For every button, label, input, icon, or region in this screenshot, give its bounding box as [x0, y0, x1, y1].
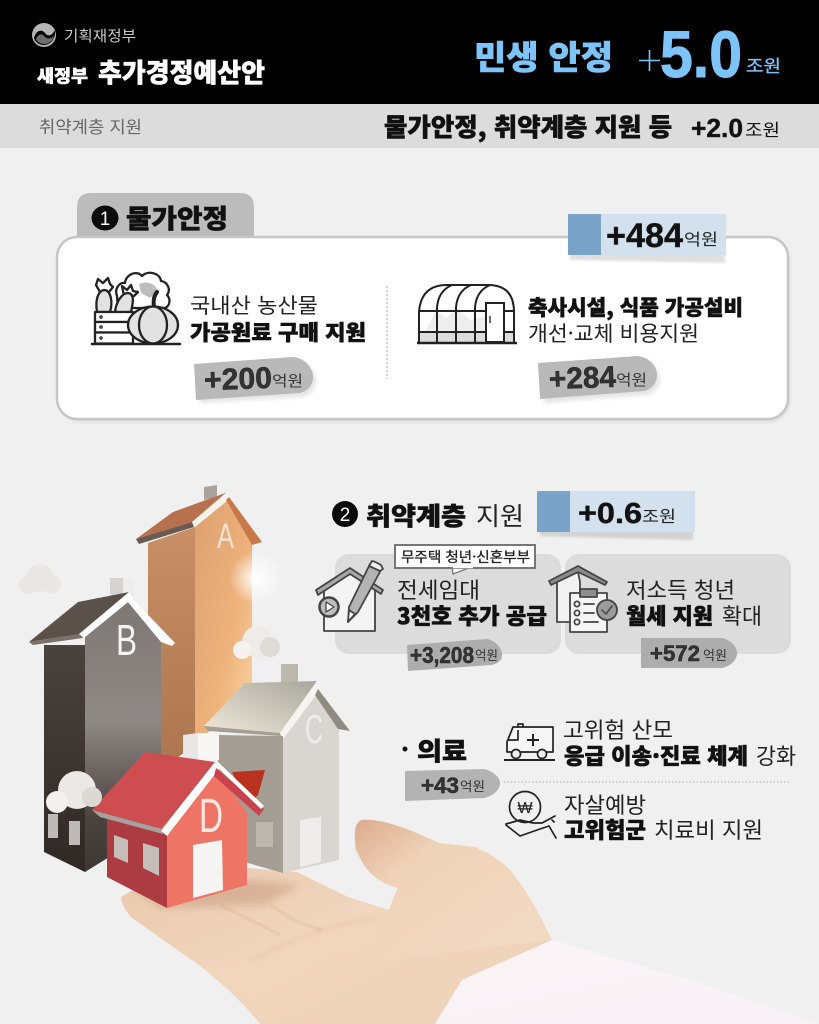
clouds — [19, 564, 280, 813]
text: rent: 확대 — [722, 599, 762, 631]
sleeve — [435, 940, 819, 1024]
pill: 284 — [538, 356, 660, 403]
house D: D — [199, 790, 223, 843]
text: facility improvement: 개선·교체 비용지원 — [528, 318, 699, 348]
sub header amount — [691, 113, 780, 143]
icon: ambulance — [504, 724, 555, 760]
text: lease: 3천호 추가 공급 — [397, 599, 547, 631]
section tab: 물가안정 — [126, 199, 228, 236]
amount tag: 0.6: 조원 — [642, 503, 676, 527]
text: suicide prevention: 치료비 지원 — [654, 813, 763, 845]
icon: greenhouse — [417, 285, 517, 343]
icon: hand with won coin: ₩ — [517, 800, 533, 817]
panel: medical support — [402, 713, 796, 845]
pill: 572: +572 — [650, 641, 700, 666]
text: domestic produce — [190, 290, 366, 347]
text: high-risk maternity: 응급 이송·진료 체계 — [564, 739, 748, 771]
pill: 3208: 억원 — [475, 645, 498, 664]
title: small: 새정부 — [37, 62, 88, 87]
text: domestic produce: 가공원료 구매 지원 — [190, 317, 366, 347]
ministry logo — [32, 23, 56, 47]
pill: 572 — [641, 638, 737, 668]
text: facility improvement — [528, 292, 743, 348]
house C: C — [305, 706, 323, 752]
amount tag: 0.6 — [537, 491, 695, 540]
pill: 572: 억원 — [703, 645, 727, 664]
pill: 284: +284 — [548, 361, 617, 396]
house C — [204, 664, 350, 873]
text: suicide prevention — [564, 788, 763, 845]
callout — [395, 545, 535, 574]
divider — [504, 781, 789, 783]
ministry name: 기획재정부 — [64, 25, 136, 46]
sub header band — [0, 104, 819, 148]
icon: house and checklist — [549, 566, 617, 632]
amount tag: 484: +484 — [606, 217, 683, 255]
text: high-risk maternity: 고위험 산모 — [563, 713, 673, 745]
text: suicide prevention: 고위험군 — [564, 813, 646, 845]
pill: 200: +200 — [203, 362, 273, 397]
house B — [29, 578, 175, 872]
text: high-risk maternity: 강화 — [756, 739, 796, 771]
callout: 무주택 청년·신혼부부 — [401, 547, 530, 567]
sub header left label: 취약계층 지원 — [39, 113, 142, 138]
text: rent: 저소득 청년 — [626, 573, 735, 605]
title: main: 추가경정예산안 — [98, 53, 265, 90]
pill: 3208: +3,208 — [410, 642, 474, 668]
text: facility improvement: 축사시설, 식품 가공설비 — [528, 292, 743, 322]
section heading: 취약계층 — [366, 497, 466, 533]
icon: vegetables — [92, 273, 180, 344]
headline amount: 5.0 — [660, 17, 742, 91]
pill: 200 — [194, 357, 316, 403]
headline: livelihood stabilization: 민생 안정 — [474, 31, 613, 79]
icon: house and pencil — [316, 561, 383, 631]
text: lease — [397, 573, 547, 631]
house B: B — [116, 616, 137, 665]
icon: hand with won coin — [506, 792, 556, 838]
section heading: 지원 — [476, 497, 524, 533]
pill: 3208 — [407, 639, 502, 671]
pill: 43 — [405, 769, 500, 801]
section heading: 2 — [340, 505, 350, 526]
text: rent: 월세 지원 — [626, 599, 713, 631]
sub header right label: 물가안정, 취약계층 지원 등 — [384, 108, 672, 144]
house D — [92, 733, 264, 908]
section tab: 1 — [100, 209, 110, 230]
sub header amount: 조원 — [745, 116, 780, 141]
text: rent — [626, 573, 762, 631]
text: domestic produce: 국내산 농산물 — [190, 290, 318, 320]
text: suicide prevention: 자살예방 — [564, 788, 646, 820]
divider — [386, 286, 388, 379]
amount tag: 484 — [568, 214, 726, 263]
pill: 200: 억원 — [272, 370, 303, 391]
panel: price stabilization — [57, 193, 789, 421]
sub header amount: +2.0 — [691, 113, 743, 143]
header band — [0, 0, 819, 104]
pill: 43: 억원 — [460, 776, 485, 795]
card: rent support — [549, 554, 791, 668]
illustration: hand — [121, 820, 819, 1024]
text: high-risk maternity — [563, 713, 796, 771]
house A: A — [217, 517, 234, 556]
headline amount — [639, 17, 781, 91]
amount tag: 0.6: +0.6 — [578, 498, 642, 530]
card — [57, 237, 789, 421]
section tab — [77, 193, 254, 238]
pill: 284: 억원 — [616, 369, 647, 390]
panel: vulnerable group support — [316, 491, 791, 671]
amount tag: 484: 억원 — [684, 226, 718, 250]
heading: medical: 의료 — [417, 732, 467, 768]
card: lease housing — [316, 545, 561, 671]
pill: 43: +43 — [421, 773, 459, 798]
house A — [136, 485, 283, 770]
text: lease: 전세임대 — [397, 573, 480, 605]
headline amount: 조원 — [746, 52, 781, 77]
illustration: houses — [19, 485, 350, 908]
section heading — [332, 497, 524, 533]
